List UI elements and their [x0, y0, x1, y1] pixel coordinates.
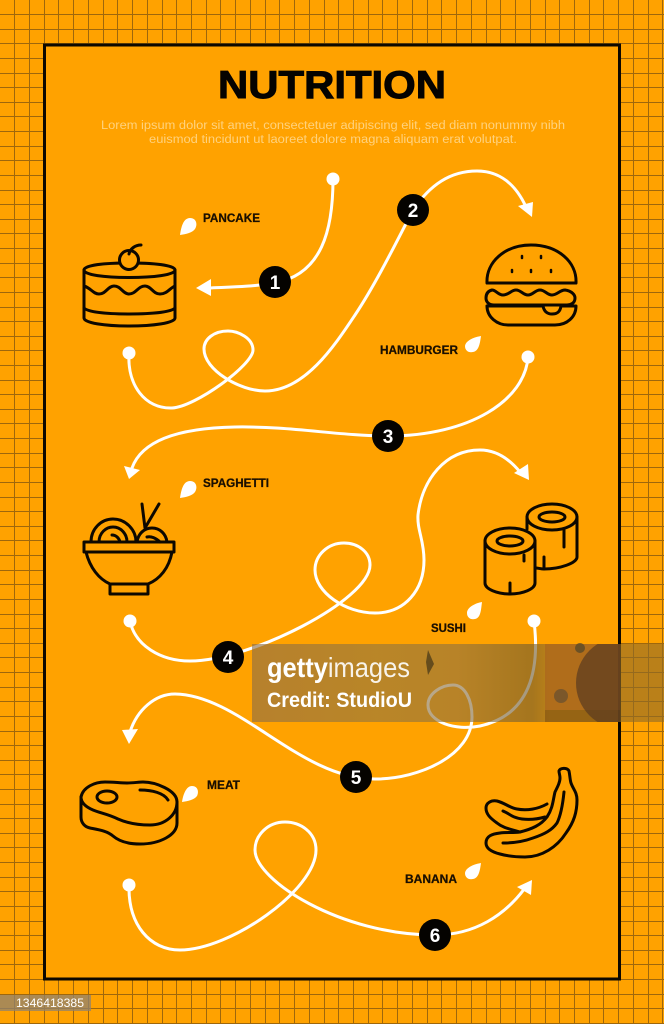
badge 1: 1	[270, 273, 281, 294]
badge 5	[340, 761, 372, 793]
icon: meat steak	[81, 782, 177, 844]
title: NUTRITION	[218, 64, 446, 107]
label: banana	[405, 863, 481, 886]
panel: main frame	[44, 45, 620, 979]
badge 1	[259, 266, 291, 298]
intro text: euismod tincidunt ut laoreet dolore magna aliquam erat volutpat.	[149, 134, 517, 146]
icon: sushi rolls	[485, 504, 577, 594]
badge 6	[419, 919, 451, 951]
label: hamburger: HAMBURGER	[380, 345, 459, 357]
badge 2	[397, 194, 429, 226]
image id tag: 1346418385	[16, 998, 84, 1010]
badge 3	[372, 420, 404, 452]
badge 5: 5	[351, 768, 362, 789]
icon: banana	[486, 768, 577, 857]
badge 3: 3	[383, 427, 393, 448]
route 4 to sushi	[124, 450, 529, 661]
watermark banner	[252, 643, 664, 722]
route 3 to spaghetti	[124, 350, 534, 479]
badge 4	[212, 641, 244, 673]
route 1 to pancake	[196, 172, 340, 296]
label: spaghetti: SPAGHETTI	[203, 478, 269, 490]
label: pancake	[180, 213, 260, 235]
label: sushi	[431, 602, 482, 635]
badge 4: 4	[223, 648, 234, 669]
watermark banner: Credit: StudioU	[267, 689, 412, 712]
icon: hamburger	[486, 245, 576, 325]
label: spaghetti	[180, 478, 269, 498]
intro text: Lorem ipsum dolor sit amet, consectetuer adipiscing elit, sed diam nonummy nibh	[101, 120, 565, 132]
route 5 to meat	[122, 614, 540, 779]
label: banana: BANANA	[405, 874, 457, 886]
label: sushi: SUSHI	[431, 623, 466, 635]
label: pancake: PANCAKE	[203, 213, 260, 225]
icon: spaghetti bowl	[84, 504, 174, 594]
watermark banner: gettyimages	[267, 652, 410, 683]
badge 6: 6	[430, 926, 440, 947]
label: meat: MEAT	[207, 780, 240, 792]
route 2 to hamburger	[122, 171, 533, 408]
route 6 to banana	[122, 822, 532, 950]
badge 2: 2	[408, 201, 418, 222]
label: meat	[182, 780, 240, 802]
intro text	[101, 120, 565, 146]
label: hamburger	[380, 336, 481, 357]
image id tag	[0, 995, 91, 1011]
icon: pancake cake	[84, 245, 175, 326]
